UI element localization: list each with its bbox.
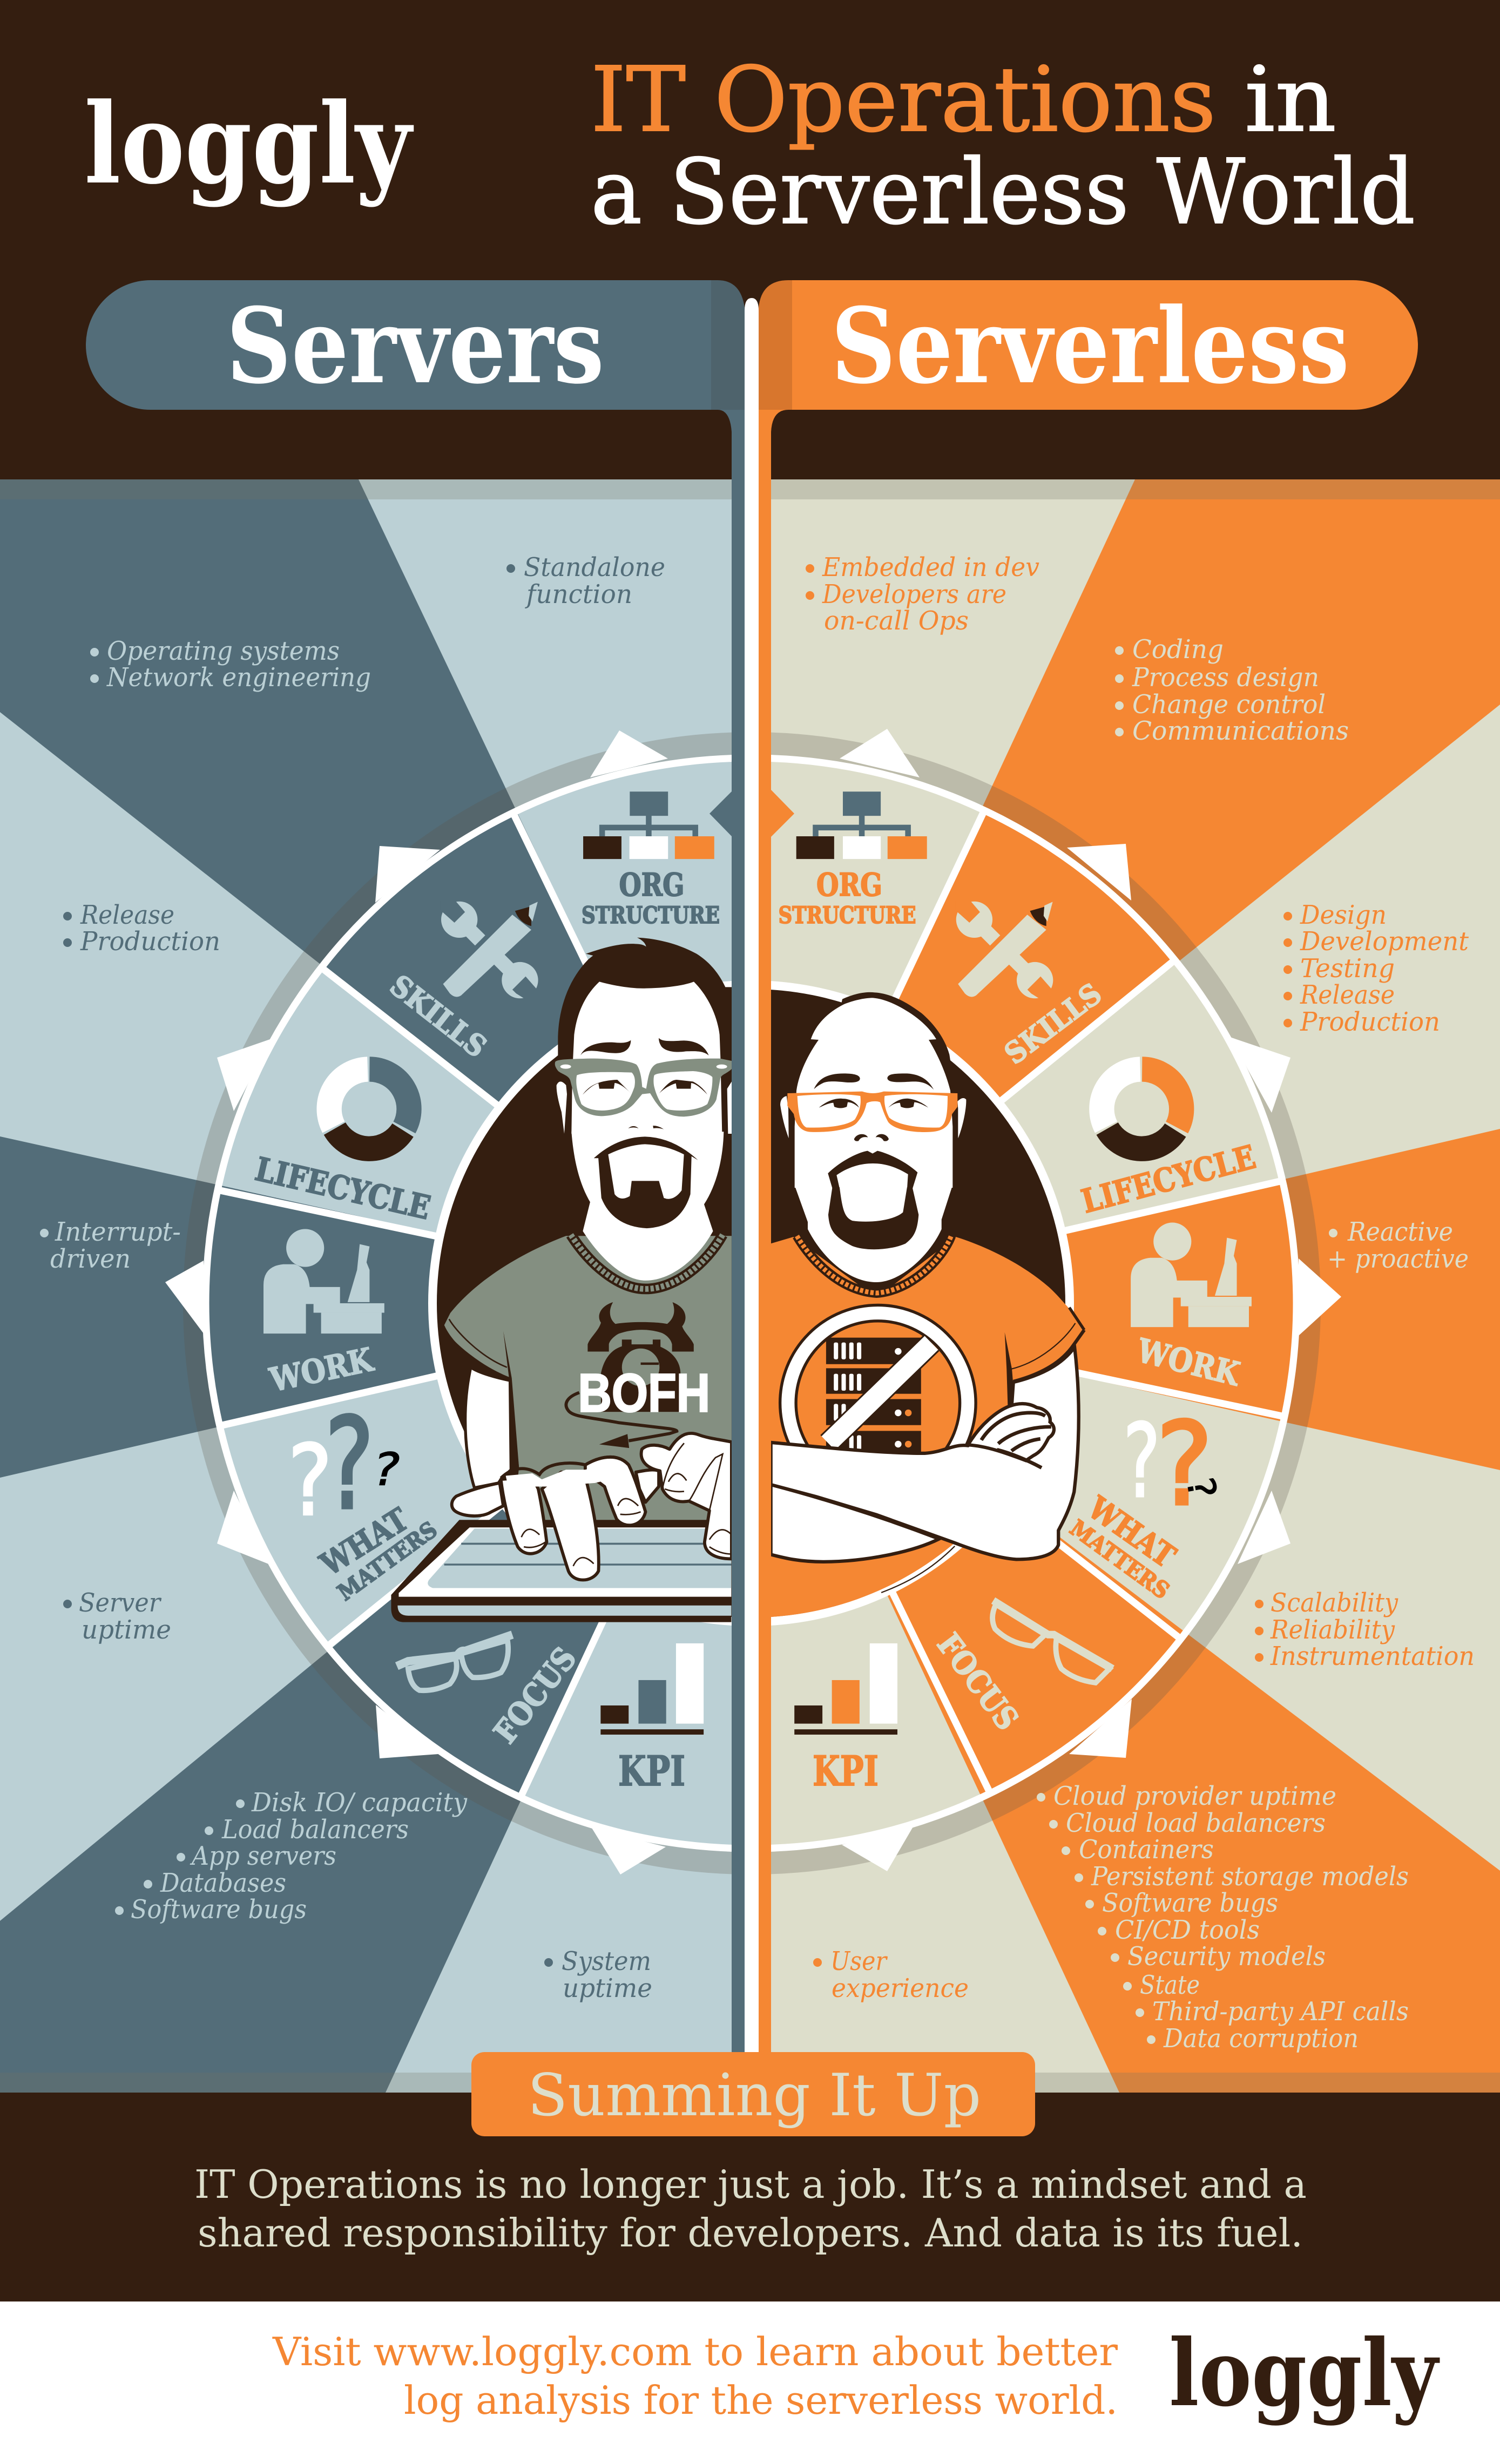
icon: question marks serverless: ? xyxy=(1156,1398,1213,1531)
bullets: lifecycle servers xyxy=(63,900,220,957)
bullets: skills serverless: Change control xyxy=(1132,689,1326,720)
bullets: focus serverless: Third-party API calls xyxy=(1152,1996,1409,2027)
icon: wrench and pencil servers xyxy=(441,899,539,1003)
labels: servers wheel: LIFECYCLE xyxy=(252,1150,434,1227)
labels: serverless wheel: FOCUS xyxy=(930,1627,1026,1737)
bullets: focus serverless: Cloud provider uptime xyxy=(1053,1781,1336,1811)
icon: org chart serverless xyxy=(796,791,927,859)
bullets: skills servers xyxy=(90,636,371,693)
icon: question marks serverless: ? xyxy=(1123,1403,1160,1521)
bullets: focus serverless: State xyxy=(1140,1970,1200,2000)
bullets: work servers: driven xyxy=(50,1244,131,1274)
pointer: serverless xyxy=(771,790,794,837)
bullets: org serverless: on-call Ops xyxy=(824,606,969,636)
segment icons: serverless xyxy=(794,791,1252,1735)
bullets: focus servers: Load balancers xyxy=(221,1815,409,1845)
bullets: focus servers: Software bugs xyxy=(131,1894,307,1925)
icon: glasses servers xyxy=(397,1635,512,1690)
upper arm and elbow xyxy=(771,1348,1079,1559)
bullets: what matters servers: uptime xyxy=(82,1615,171,1645)
labels: serverless wheel: WORK xyxy=(1133,1332,1244,1394)
footer call to action: log analysis for the serverless world. xyxy=(404,2378,1118,2423)
icon: question marks servers xyxy=(288,1391,400,1538)
icon: question marks servers: ? xyxy=(373,1444,400,1496)
labels: serverless wheel: LIFECYCLE xyxy=(1078,1138,1260,1221)
icon: org chart servers xyxy=(583,791,714,859)
bullets: focus serverless: Security models xyxy=(1127,1941,1326,1972)
BOFH text: BOFH xyxy=(578,1363,710,1423)
bullets: focus servers xyxy=(115,1788,468,1925)
labels: serverless wheel: STRUCTURE xyxy=(779,902,916,929)
collar xyxy=(797,1236,951,1293)
shirt logo and hands xyxy=(452,1302,732,1580)
labels: servers wheel: SKILLS xyxy=(383,968,494,1064)
bullets: lifecycle serverless xyxy=(1283,900,1469,1037)
bullets: focus servers: App servers xyxy=(190,1841,336,1871)
bullets: skills serverless: Coding xyxy=(1132,634,1224,665)
lower forearm xyxy=(771,1485,939,1562)
bullets: what matters serverless: Scalability xyxy=(1271,1588,1398,1618)
background: footer white band xyxy=(0,2301,1500,2464)
hand xyxy=(968,1404,1054,1460)
bullets: skills serverless: Communications xyxy=(1132,716,1349,746)
hands xyxy=(452,1433,732,1580)
bullets: skills serverless: Process design xyxy=(1132,662,1319,693)
labels: servers wheel: WHAT xyxy=(314,1501,415,1583)
background: summary brown band xyxy=(0,2093,1500,2301)
summing up box xyxy=(471,2052,1035,2136)
bullets: skills servers: Network engineering xyxy=(106,662,371,693)
labels: serverless wheel: WHAT xyxy=(1081,1489,1182,1575)
labels: servers wheel: STRUCTURE xyxy=(582,902,720,929)
icon: lifecycle ring serverless xyxy=(1102,1069,1181,1149)
head xyxy=(780,992,966,1189)
bullets: focus servers: Disk IO/ capacity xyxy=(251,1788,468,1818)
bullets: focus serverless: Cloud load balancers xyxy=(1066,1808,1326,1838)
bullets: what matters servers: Server xyxy=(79,1588,162,1618)
hair and upper face xyxy=(555,938,732,1134)
panel: servers rays background xyxy=(0,479,751,2093)
summing up box: Summing It Up xyxy=(528,2062,981,2129)
title xyxy=(591,48,1415,245)
icon: work desk serverless xyxy=(1131,1223,1252,1327)
no-server emblem xyxy=(788,1313,968,1493)
center white line xyxy=(745,298,759,2057)
background: page header band xyxy=(0,0,1500,479)
summary text xyxy=(194,2162,1307,2256)
bullets: lifecycle serverless: Development xyxy=(1300,926,1469,957)
labels: serverless wheel: ORG xyxy=(816,867,882,903)
icon: kpi bars serverless xyxy=(794,1643,897,1735)
icon: question marks servers: ? xyxy=(325,1391,374,1538)
bullets: focus serverless: Software bugs xyxy=(1102,1888,1278,1918)
bullets: lifecycle serverless: Production xyxy=(1300,1007,1440,1037)
labels: serverless wheel: MATTERS xyxy=(1065,1514,1174,1604)
body, emblem and arms xyxy=(771,1186,1084,1593)
wheel: servers half xyxy=(165,730,732,1874)
labels: servers wheel: KPI xyxy=(618,1747,685,1795)
bullets: lifecycle servers: Production xyxy=(80,926,220,957)
bullets: focus serverless xyxy=(1037,1781,1409,2054)
bullets: kpi servers: System xyxy=(562,1946,651,1976)
bullets: focus serverless: CI/CD tools xyxy=(1115,1915,1260,1945)
bullets: focus serverless: Persistent storage models xyxy=(1091,1861,1409,1892)
bullets: standalone function xyxy=(506,552,665,610)
bullets: org serverless xyxy=(806,552,1039,636)
character: serverless developer xyxy=(437,989,1084,1617)
title: IT Operations xyxy=(591,48,1216,152)
bullets: what matters serverless xyxy=(1255,1588,1475,1671)
lower beard xyxy=(828,1187,918,1249)
icon: kpi bars servers xyxy=(600,1643,704,1735)
center divider and servers tab xyxy=(86,280,745,2057)
bullets: kpi serverless: experience xyxy=(832,1973,969,2003)
bullets: what matters serverless: Instrumentation xyxy=(1270,1641,1475,1671)
labels: serverless wheel: SKILLS xyxy=(998,976,1108,1071)
heading: Servers: Servers xyxy=(226,286,604,407)
lower face, beard and keyboard xyxy=(391,1132,731,1622)
character: BOFH server admin xyxy=(391,938,732,1622)
bullets: lifecycle serverless: Release xyxy=(1300,980,1395,1010)
bullets: standalone function: function xyxy=(525,579,632,610)
labels: servers wheel xyxy=(252,867,720,1795)
bullets: focus serverless: Containers xyxy=(1079,1835,1214,1865)
bullets: kpi servers: uptime xyxy=(563,1973,652,2003)
bullets: standalone function: Standalone xyxy=(524,552,665,583)
logo: loggly header: loggly xyxy=(84,79,414,209)
icon: question marks servers: ? xyxy=(288,1424,333,1538)
bullets: org serverless: Developers are xyxy=(822,579,1006,610)
center divider and serverless tab xyxy=(759,280,1418,2057)
labels: serverless wheel: KPI xyxy=(813,1747,879,1795)
bullets: work servers: Interrupt- xyxy=(55,1217,181,1247)
wheel: serverless half xyxy=(771,729,1341,1874)
tail arrow xyxy=(566,1392,677,1441)
bullets: work serverless xyxy=(1327,1217,1469,1274)
heading: Serverless: Serverless xyxy=(831,286,1349,407)
icon: wrench and pencil serverless xyxy=(955,899,1054,1003)
bullets: kpi servers xyxy=(544,1946,652,2003)
logo: loggly footer: loggly xyxy=(1169,2319,1440,2427)
bullets: kpi serverless xyxy=(813,1946,969,2003)
bullets: org serverless: Embedded in dev xyxy=(822,552,1039,583)
horned phone xyxy=(587,1302,694,1412)
icon: glasses serverless xyxy=(992,1601,1112,1683)
title: in xyxy=(1245,48,1336,152)
bullets: skills servers: Operating systems xyxy=(107,636,340,666)
icon: work desk servers xyxy=(263,1229,384,1333)
segment icons: servers xyxy=(263,791,714,1735)
icon: question marks serverless: ? xyxy=(1178,1474,1225,1502)
bullets: kpi serverless: User xyxy=(830,1946,888,1976)
bullets: what matters servers xyxy=(63,1588,171,1645)
bullets: skills serverless xyxy=(1115,634,1349,746)
bullets: lifecycle serverless: Design xyxy=(1300,900,1387,930)
panel: serverless rays background xyxy=(751,479,1500,2093)
labels: serverless wheel xyxy=(779,867,1260,1795)
summary text: IT Operations is no longer just a job. It’s a mindset and a xyxy=(194,2162,1307,2207)
icon: question marks serverless xyxy=(1123,1398,1225,1531)
icon: lifecycle ring servers xyxy=(329,1069,409,1149)
labels: servers wheel: ORG xyxy=(619,867,685,903)
bullets: work serverless: Reactive xyxy=(1347,1217,1453,1247)
bullets: focus servers: Databases xyxy=(160,1868,286,1898)
bullets: lifecycle serverless: Testing xyxy=(1300,953,1395,984)
bullets: work serverless: + proactive xyxy=(1327,1244,1469,1274)
labels: servers wheel: WORK xyxy=(266,1341,377,1399)
lower shirt in circle xyxy=(437,989,1065,1617)
bullets: focus serverless: Data corruption xyxy=(1163,2023,1359,2054)
footer call to action xyxy=(272,2329,1118,2423)
labels: servers wheel: FOCUS xyxy=(487,1640,584,1750)
labels: servers wheel: MATTERS xyxy=(333,1516,442,1606)
bullets: work servers xyxy=(40,1217,181,1274)
tab shade bands xyxy=(711,280,792,410)
band shadow strips xyxy=(0,479,1500,2093)
bullets: what matters serverless: Reliability xyxy=(1270,1615,1395,1645)
summary text: shared responsibility for developers. And data is its fuel. xyxy=(198,2210,1303,2256)
pointer: servers xyxy=(710,791,732,836)
bullets: lifecycle servers: Release xyxy=(80,900,174,930)
neck and jaw xyxy=(795,1186,952,1282)
footer call to action: Visit www.loggly.com to learn about better xyxy=(272,2329,1118,2374)
title: a Serverless World xyxy=(591,140,1415,245)
torso and shirt xyxy=(442,1202,732,1525)
